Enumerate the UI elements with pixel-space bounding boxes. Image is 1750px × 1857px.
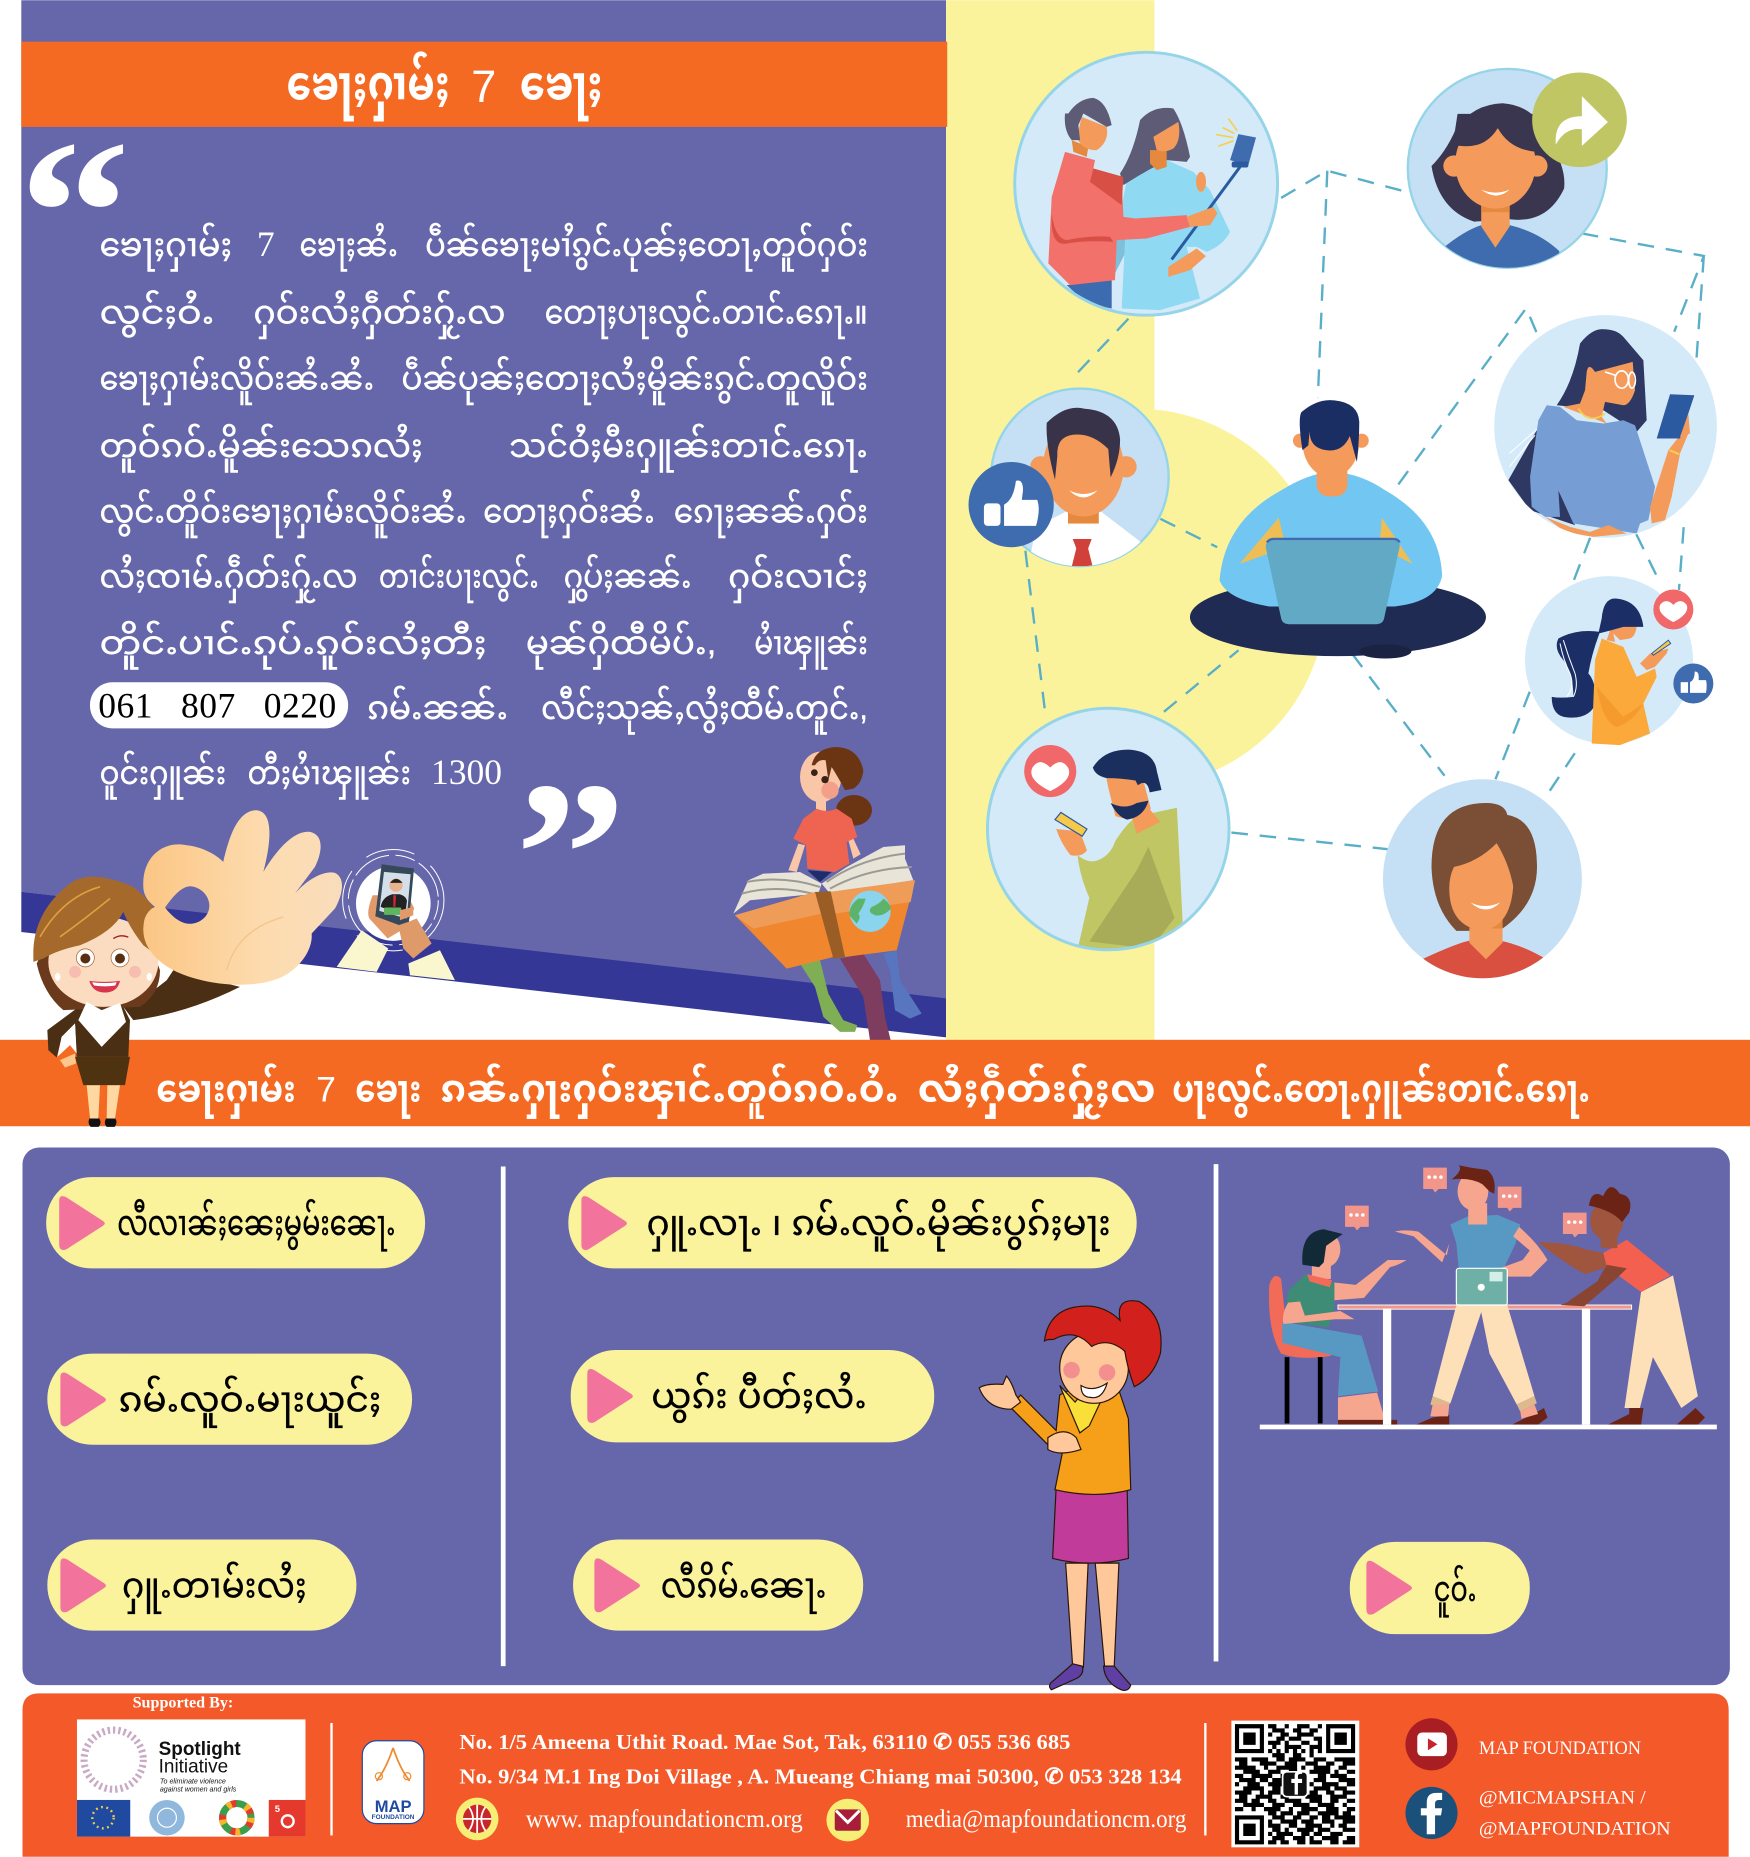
pill: item 3 [47, 1539, 356, 1631]
yellow background stripe [946, 0, 1154, 1040]
paragraph text: ၵေႃႈၼၼ်ႉႁဝ်း [674, 488, 868, 537]
paragraph text: ပဵၼ်ၶေႃႈမၢႆၵွင်ႉပုၼ်ႈတေႃႇတူဝ်ႁဝ်း [425, 222, 868, 271]
pill: item 1 [46, 1177, 425, 1268]
supported by label: Supported By: [133, 1695, 233, 1712]
Facebook labels: @MICMAPSHAN / [1479, 1787, 1647, 1808]
orange banner: ၶေႃး [355, 1068, 422, 1119]
central figure with laptop [1190, 400, 1486, 659]
paragraph text: ႁဝ်းလၢင်ႈ [728, 553, 868, 602]
pill: item 5: ယွၵ်း ပီတ်ႈလႆႉ [651, 1371, 867, 1424]
pill: item 4: ႁူႉလႃႉ ၊ ၵမ်ႉလူဝ်ႉမိုၼ်းပွၵ်ႈမႃး [646, 1198, 1111, 1252]
paragraph text: လႆႈၸၢမ်ႉႁဵတ်းႁႂ်ႉလ [99, 553, 358, 602]
pill: item 1: လီလၢၼ်ႈၼေႈမွမ်းၼေႃႉ [117, 1198, 395, 1252]
paragraph text: ႁွပ်ႈၼၼ်ႉ [564, 553, 691, 602]
sponsor logos: 5 [275, 1804, 280, 1815]
paragraph text: 1300 [431, 752, 502, 792]
paragraph text: တိူင်ႉပၢင်ႉၵုပ်ႉၵူဝ်းလႆႈတီႈ [99, 620, 487, 669]
lower panel [22, 1148, 1730, 1685]
pill: item 7: ငူဝ်ႉ [1434, 1564, 1476, 1618]
pill: item 6 [573, 1539, 863, 1631]
pill: item 5 [571, 1350, 934, 1442]
avatar: man with like icon [969, 389, 1169, 569]
footer [22, 1693, 1729, 1857]
address lines: No. 1/5 Ameena Uthit Road. Mae Sot, Tak, 63110 ✆ 055 536 685 [459, 1730, 1070, 1754]
illustration: girl reading book [733, 747, 922, 1040]
avatar: woman with glasses and tablet [1494, 315, 1717, 538]
avatar: woman with share icon [1408, 69, 1627, 287]
orange banner: ပႃးလွင်ႉတေႃႉႁူၼ်းတၢင်ႉၵေႃႉ [1172, 1063, 1590, 1119]
icon: small thumbs up [1673, 664, 1713, 703]
orange banner: ၶေႃးႁၢမ်း [156, 1063, 296, 1119]
illustration: presenter woman with red hair [979, 1301, 1161, 1690]
address lines [459, 1730, 1186, 1833]
MAP foundation logo: MAP [375, 1797, 412, 1816]
sponsor logos: Spotlight [159, 1739, 241, 1760]
avatar: bearded man with phone and heart [987, 708, 1229, 950]
icon: heart bubble [1653, 590, 1693, 630]
network dashed connectors [1025, 171, 1704, 849]
title bar: ၶေႃႈ [520, 58, 603, 122]
paragraph text: တေႃႈပႃးလွင်ႉတၢင်ႉၵေႃႉ။ [545, 289, 868, 338]
avatar: smiling woman [1383, 779, 1582, 983]
address lines: media@mapfoundationcm.org [906, 1806, 1186, 1833]
sponsor logos: To eliminate violence [160, 1777, 226, 1785]
address lines: No. 9/34 M.1 Ing Doi Village , A. Mueang Chiang mai 50300, ✆ 053 328 134 [459, 1764, 1182, 1788]
icon: globe [456, 1798, 498, 1840]
paragraph text: တူဝ်ၵဝ်ႉမိူၼ်းသေၵလႆႈ [99, 423, 423, 472]
orange banner: လႆႈႁဵတ်းႁႂ်ႈလ [918, 1062, 1156, 1119]
speech bubbles [1345, 1168, 1587, 1238]
paragraph text: မုၼ်ႁိထီမိပ်ႉ, [526, 620, 716, 669]
orange banner: ၵၼ်ႉႁႃးႁဝ်းၾၢင်ႉတူဝ်ၵဝ်ႉဝႆႉ [440, 1063, 899, 1119]
pill: item 7 [1350, 1542, 1530, 1634]
paragraph text: ႁဝ်းလႆႈႁဵတ်းႁႂ်ႉလ [253, 289, 506, 338]
paragraph text: တီႈမႆၢၾူၼ်း [247, 750, 411, 799]
Facebook labels [1479, 1788, 1671, 1839]
floor line [1260, 1425, 1717, 1429]
illustration: woman with OK hand [33, 810, 342, 1127]
MAP foundation logo: FOUNDATION [372, 1814, 415, 1821]
opening quote mark: “ [19, 97, 130, 327]
seated woman [1269, 1229, 1407, 1425]
paragraph text: ၶေႃႈႁၢမ်ႈ [99, 222, 232, 271]
closing quote mark: ” [515, 739, 626, 969]
Facebook labels: @MAPFOUNDATION [1479, 1818, 1671, 1839]
phone number pill: 061 807 0220 [98, 686, 336, 726]
illustration: team talking around table [1260, 1165, 1717, 1429]
pill: item 3: ႁူႉတၢမ်းလႆႈ [122, 1560, 307, 1614]
avatar: couple taking selfie [1015, 52, 1278, 315]
icon: Facebook [1405, 1787, 1458, 1839]
pill: item 2: ၵမ်ႉလူဝ်ႉမႃးယူင်ႈ [118, 1375, 381, 1429]
MAP foundation logo [362, 1741, 424, 1824]
sponsor logos: Initiative [159, 1757, 228, 1778]
pill: item 4 [568, 1177, 1137, 1268]
icon: thumbs up [969, 462, 1054, 547]
paragraph text [99, 222, 868, 799]
paragraph text: လွင်ႈဝႆႉ [99, 289, 214, 337]
icon: YouTube [1405, 1718, 1458, 1770]
icon: mail [826, 1799, 869, 1841]
orange banner [0, 1040, 1750, 1126]
paragraph text: ၵမ်ႉၼၼ်ႉ [367, 685, 508, 727]
title bar: ၶေႃႈႁၢမ်ႈ [287, 52, 450, 122]
illustration: hands holding phone [337, 850, 455, 980]
paragraph text: လီင်ႈသုၼ်ႇလွႆႈထီမ်ႉတူင်ႉ, [541, 685, 868, 734]
OK hand gesture [143, 810, 342, 985]
QR code [1231, 1721, 1359, 1847]
title bar: 7 [471, 61, 496, 112]
address lines: www. mapfoundationcm.org [526, 1806, 803, 1833]
paragraph text: တၢင်းပႃးလွင်ႉ [379, 553, 539, 602]
title bar [21, 42, 947, 127]
icon: share arrow [1532, 72, 1627, 167]
paragraph text: ၶေႃႈၼႆႉ [300, 222, 398, 271]
paragraph text: ပဵၼ်ပုၼ်ႈတေႃႈလႆႈမိူၼ်းၵွင်ႉတူလိူဝ်း [401, 356, 868, 405]
avatar: girl with phone [1525, 576, 1713, 745]
sponsor logos: against women and girls [160, 1786, 237, 1794]
icon: heart bubble large [1024, 745, 1076, 797]
table [1338, 1305, 1632, 1425]
leaning man [1538, 1187, 1705, 1425]
paragraph text: တေႃႈႁဝ်းၼႆႉ [483, 488, 655, 537]
pill: item 2 [47, 1354, 412, 1445]
pill: item 6: လီၵိမ်ႉၼေႃႉ [661, 1560, 826, 1614]
paragraph text: လွင်ႉတိူဝ်းၶေႃႈႁၢမ်းလိူဝ်းၼႆႉ [99, 488, 467, 537]
paragraph text: ဝူင်းႁူၼ်း [99, 750, 226, 799]
YouTube label: MAP FOUNDATION [1479, 1738, 1641, 1759]
paragraph text: သင်ဝႆႈမီးႁူၼ်းတၢင်ႉၵေႃႉ [509, 423, 868, 472]
paragraph text: မႆၢၾူၼ်း [754, 620, 868, 669]
sponsor logos [77, 1719, 305, 1837]
left purple panel [21, 0, 946, 1037]
orange banner: 7 [316, 1069, 336, 1109]
standing man [1395, 1165, 1548, 1425]
paragraph text: ၶေႃႈႁၢမ်းလိူဝ်းၼႆႉၼႆႉ [99, 356, 374, 405]
yellow circle behind central figure [1154, 410, 1318, 770]
paragraph text: 7 [257, 224, 275, 264]
